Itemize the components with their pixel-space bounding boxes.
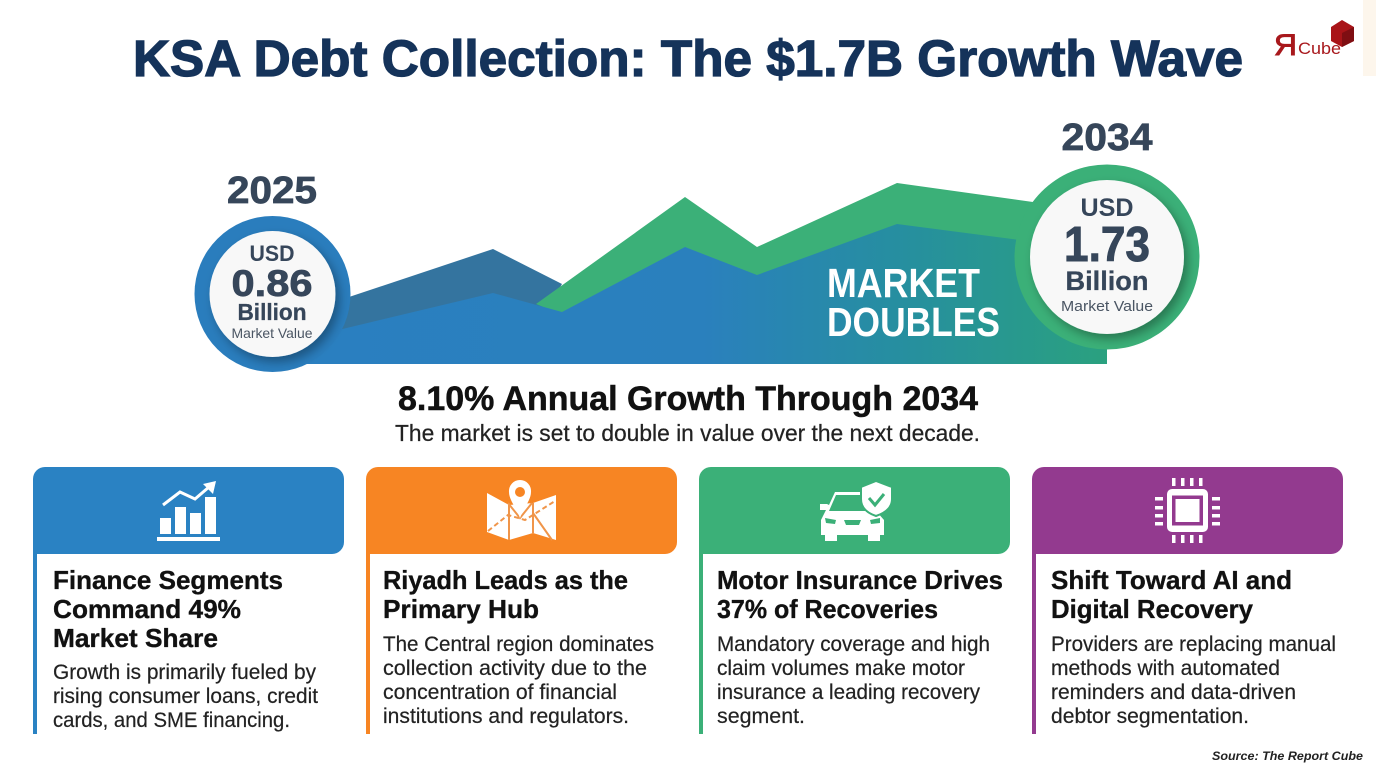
circle: 2025 value: Market Value [232,325,313,341]
card heading: Command 49% [53,594,241,624]
card text [717,633,990,728]
label: market doubles: MARKET [827,260,980,306]
circle: 2034 value: Billion [1066,266,1148,296]
card text [383,633,654,728]
card heading: Motor Insurance Drives [717,565,1003,595]
circle: 2025 value [194,216,350,372]
panel: AI and digital recovery [1032,467,1343,734]
card text: collection activity due to the [383,657,647,680]
icon: car with shield [820,481,892,541]
logo: RCube: Cube [1298,39,1341,58]
card text [53,661,318,732]
label: market doubles: DOUBLES [827,299,1000,345]
circle: 2034 value: USD [1080,194,1134,222]
back area: green and slate blue [340,183,1040,340]
icon: microchip [1155,478,1220,543]
card text: reminders and data-driven [1051,681,1296,704]
card text: The Central region dominates [383,633,654,656]
panel: motor insurance [699,467,1010,734]
card text: rising consumer loans, credit [53,685,318,708]
circle: 2034 value: Market Value [1061,298,1153,315]
card heading: Shift Toward AI and [1051,565,1292,595]
icon: bar chart with arrow [157,481,220,541]
circle: 2025 value: Billion [238,299,306,325]
card text: Mandatory coverage and high [717,633,990,656]
icon: map with pin [487,480,556,540]
year 2034: 2034 [1062,117,1152,159]
card heading: Digital Recovery [1051,594,1254,624]
card text: cards, and SME financing. [53,709,290,732]
panel: riyadh hub [366,467,677,734]
title: KSA Debt Collection: The $1.7B Growth Wave [133,30,1243,87]
card text: insurance a leading recovery [717,681,980,704]
card heading [717,565,1003,624]
card heading: 37% of Recoveries [717,594,938,624]
card text: Providers are replacing manual [1051,633,1336,656]
card heading: Market Share [53,623,218,653]
source note: Source: The Report Cube [1212,749,1363,763]
card heading: Finance Segments [53,565,283,595]
card text: debtor segmentation. [1051,705,1249,728]
card heading: Riyadh Leads as the [383,565,628,595]
card heading [53,565,283,653]
card text: claim volumes make motor [717,657,965,680]
circle: 2025 value: USD [250,241,294,266]
logo: RCube: Я [1274,29,1297,62]
circle: 2034 value: 1.73 [1064,218,1150,272]
circle: 2034 value [1014,164,1200,350]
card heading [383,565,628,624]
card text: methods with automated [1051,657,1280,680]
panel: finance segments [33,467,344,734]
front area: gradient [300,224,1107,364]
growth subheading: The market is set to double in value over the next decade. [395,420,980,446]
card heading [1051,565,1292,624]
growth area chart [300,183,1107,364]
year 2025: 2025 [227,170,317,212]
label: market doubles [827,260,1000,345]
card text [1051,633,1336,728]
growth headline: 8.10% Annual Growth Through 2034 [398,380,978,418]
card text: Growth is primarily fueled by [53,661,316,684]
card text: segment. [717,705,805,728]
card heading: Primary Hub [383,594,539,624]
logo: RCube [1274,20,1354,62]
circle: 2025 value: 0.86 [232,263,312,304]
card text: concentration of financial [383,681,617,704]
card text: institutions and regulators. [383,705,629,728]
decorative corner tint [1363,0,1376,76]
